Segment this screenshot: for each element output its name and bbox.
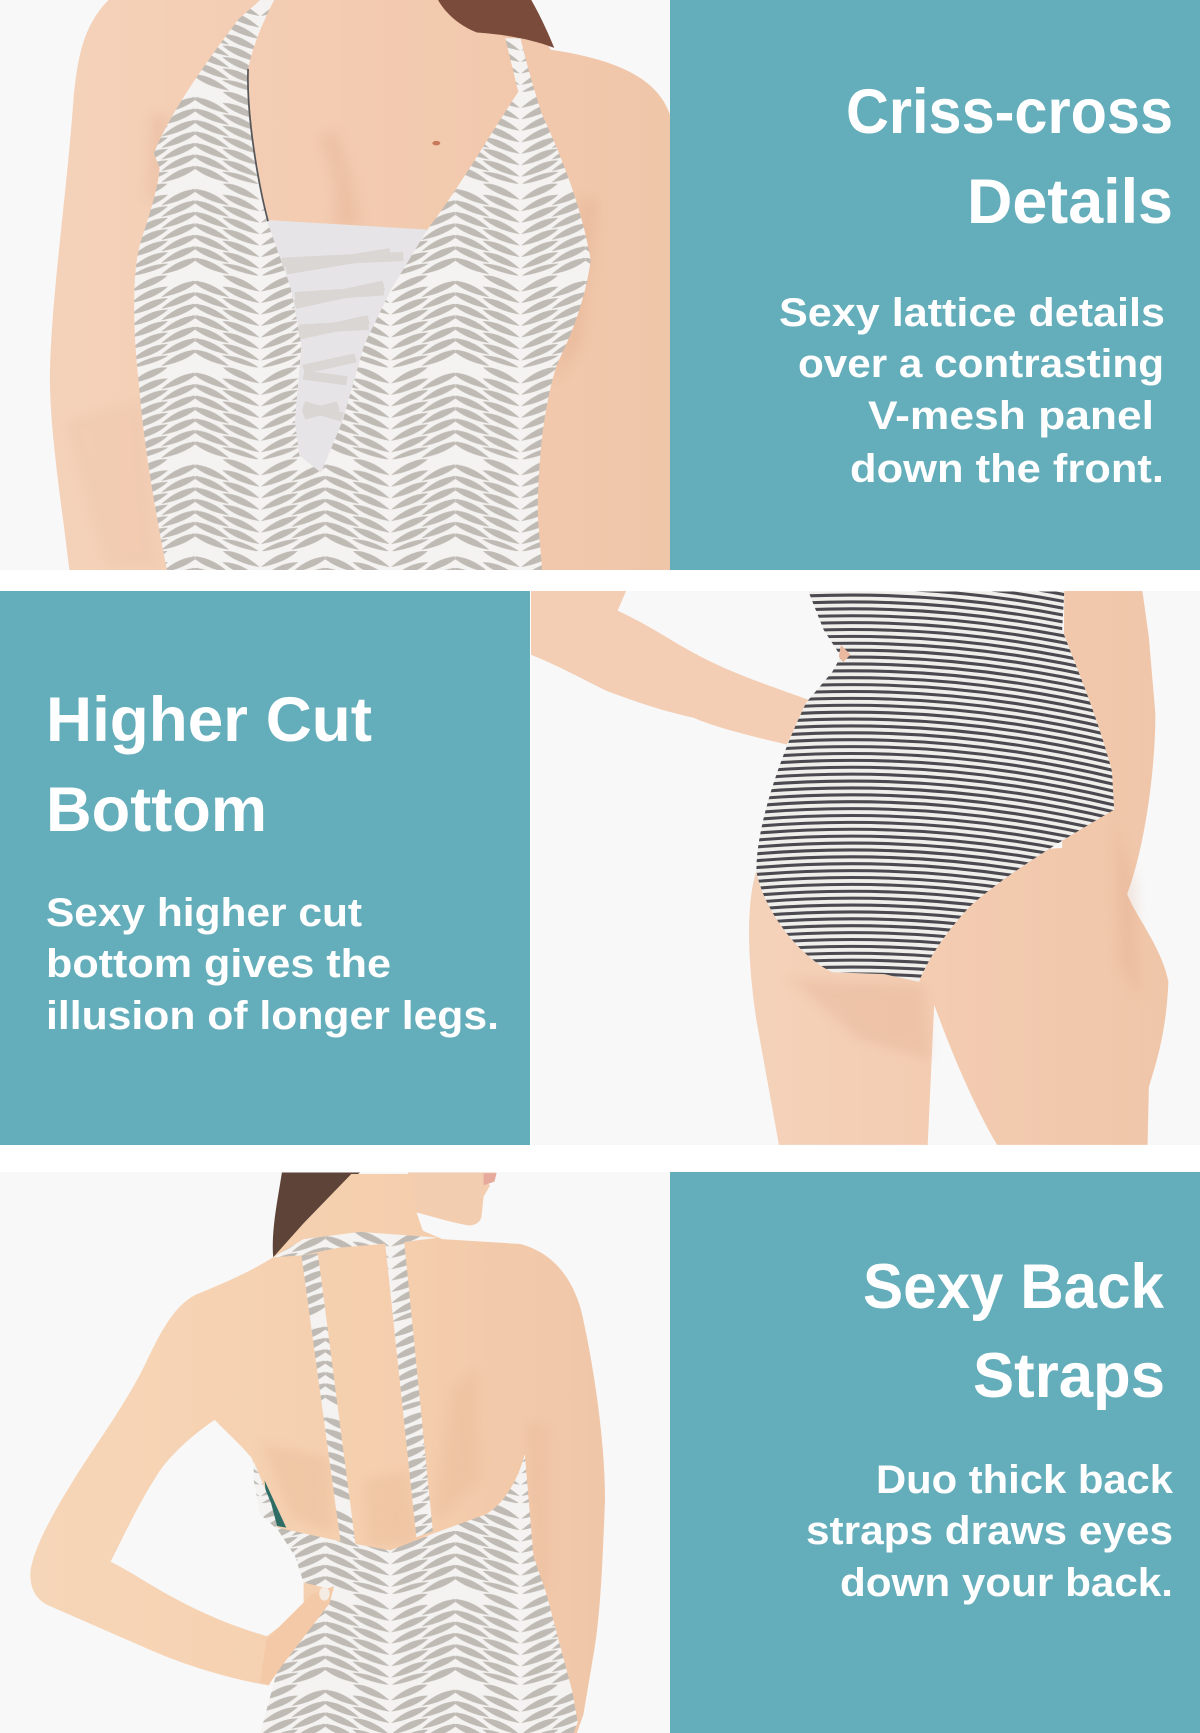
mole (432, 141, 440, 145)
heading: Criss-cross (846, 77, 1173, 147)
description: Sexy higher cut (46, 891, 362, 935)
hand on hip (260, 1586, 334, 1685)
description: down your back. (840, 1561, 1173, 1605)
suit body with zebra print (254, 1454, 578, 1733)
dark inner lining (265, 1480, 286, 1528)
legs and torso skin (749, 591, 1168, 1145)
heading: Straps (973, 1341, 1165, 1411)
description: illusion of longer legs. (46, 994, 499, 1038)
heading (863, 1252, 1165, 1411)
description: over a contrasting (798, 342, 1164, 386)
leg shading (802, 870, 1140, 1052)
hair (438, 0, 554, 48)
description: down the front. (850, 447, 1164, 491)
lips (484, 1173, 497, 1185)
photo: back view of high-cut striped bottom (531, 561, 1200, 1145)
heading: Details (967, 167, 1173, 237)
back, shoulders and arms (30, 1174, 605, 1733)
description (46, 891, 499, 1038)
mesh V panel (267, 220, 427, 473)
panel: sexy back straps (670, 1172, 1200, 1733)
lattice straps (282, 253, 403, 417)
panel: criss-cross details (670, 0, 1200, 570)
panel: higher cut bottom (0, 591, 530, 1145)
heading: Bottom (46, 775, 267, 845)
swimsuit with stripes (756, 592, 1114, 982)
nail (319, 1587, 330, 1601)
finger behind waist (839, 645, 850, 662)
arm on hip (531, 591, 811, 745)
swimsuit body with zebra print (134, 0, 591, 570)
gap between arm and waist (111, 1420, 304, 1636)
description: bottom gives the (46, 942, 391, 986)
description: straps draws eyes (806, 1509, 1173, 1553)
heading (46, 685, 372, 845)
photo: back view with duo straps (30, 1172, 605, 1733)
description: Duo thick back (876, 1458, 1174, 1502)
right back strap (385, 1241, 433, 1537)
photo: front of swimsuit with criss-cross lattice (0, 0, 670, 570)
left back strap (301, 1253, 356, 1545)
heading: Sexy Back (863, 1252, 1165, 1322)
description: Sexy lattice details (779, 291, 1165, 335)
model skin: shoulders and arms (50, 0, 670, 570)
description (806, 1458, 1174, 1605)
description: V-mesh panel (868, 394, 1154, 438)
heading (846, 77, 1173, 237)
description (779, 291, 1165, 491)
hair (273, 1173, 360, 1257)
neckline inner trim (248, 69, 268, 221)
face and chin (408, 1173, 497, 1225)
neck band (273, 1232, 438, 1257)
skin shading (150, 117, 595, 360)
back shading (272, 1388, 472, 1539)
heading: Higher Cut (46, 685, 372, 755)
